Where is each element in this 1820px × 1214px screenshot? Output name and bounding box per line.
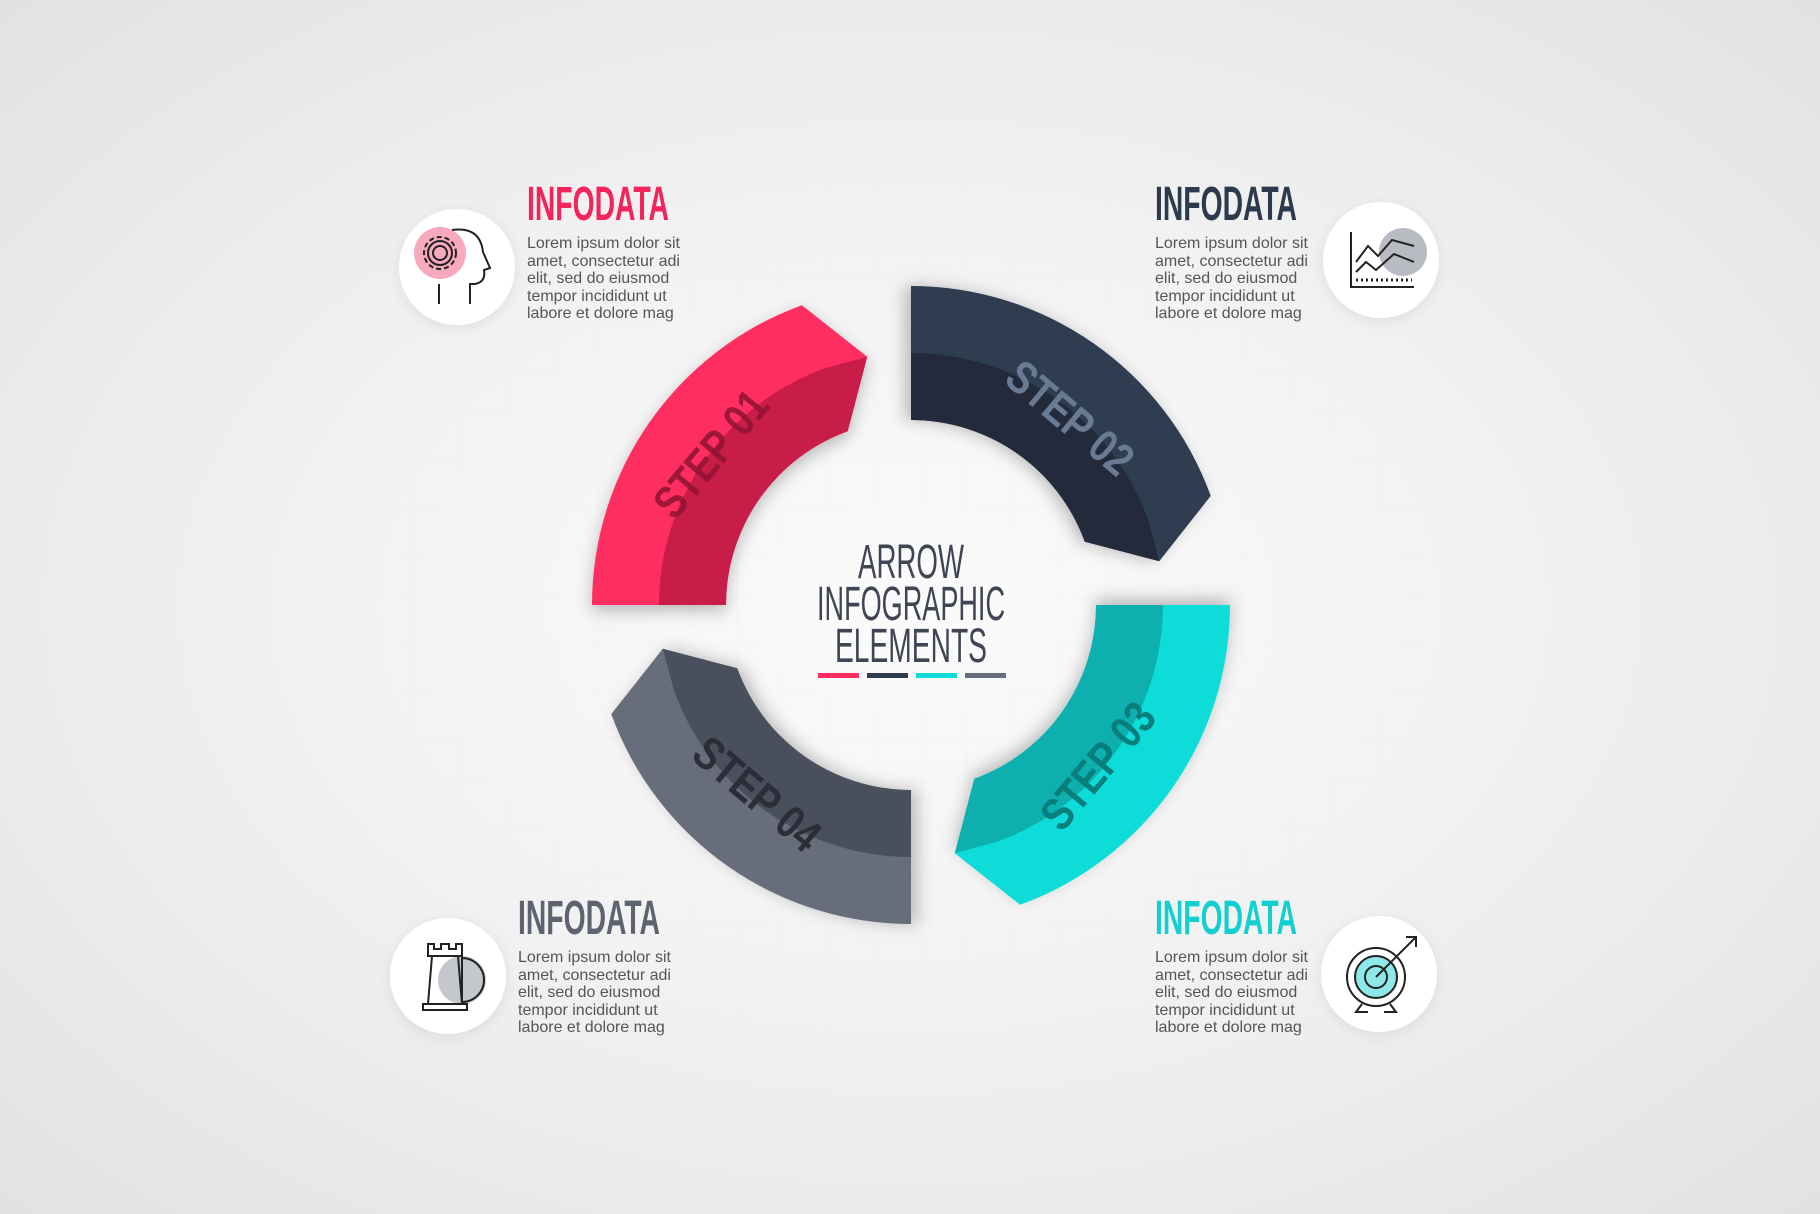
arrow segment: step 03 [955, 605, 1230, 905]
text block: infodata 2 [1155, 178, 1308, 322]
label: step 04: STEP 04 [683, 726, 832, 862]
text block: infodata 2: Lorem ipsum dolor sit [1155, 235, 1308, 252]
text block: infodata 1: elit, sed do eiusmod [527, 270, 669, 287]
text block: infodata 4: tempor incididunt ut [518, 1002, 658, 1019]
text block: infodata 3: elit, sed do eiusmod [1155, 984, 1297, 1001]
text block: infodata 3: Lorem ipsum dolor sit [1155, 949, 1308, 966]
label: step 03: STEP 03 [1030, 692, 1166, 840]
label: step 02: STEP 02 [996, 350, 1144, 486]
text block: infodata 1: amet, consectetur adi [527, 253, 680, 270]
text block: infodata 2: INFODATA [1155, 178, 1297, 231]
text block: infodata 1: labore et dolore mag [527, 305, 674, 322]
text block: infodata 1 [527, 178, 680, 322]
text block: infodata 3: amet, consectetur adi [1155, 967, 1308, 984]
icon: target [1321, 916, 1437, 1032]
text block: infodata 1: tempor incididunt ut [527, 288, 667, 305]
text block: infodata 2: elit, sed do eiusmod [1155, 270, 1297, 287]
text block: infodata 2: tempor incididunt ut [1155, 288, 1295, 305]
icon: chess rook with pie [390, 918, 506, 1034]
text block: infodata 1: INFODATA [527, 178, 669, 231]
arrow segment: step 04 [611, 649, 911, 924]
text block: infodata 3 [1155, 892, 1308, 1036]
text block: infodata 3: labore et dolore mag [1155, 1019, 1302, 1036]
arrow segment: step 01 [592, 305, 867, 605]
text block: infodata 3: INFODATA [1155, 892, 1297, 945]
text block: infodata 4 [518, 892, 672, 1036]
text block: infodata 3: tempor incididunt ut [1155, 1002, 1295, 1019]
text block: infodata 4: amet, consectetur adi [518, 967, 671, 984]
text block: infodata 4: elit, sed do eiusmod [518, 984, 660, 1001]
center title [817, 536, 1005, 673]
label: step 01: STEP 01 [643, 380, 779, 528]
center title: ELEMENTS [835, 620, 987, 673]
step labels [643, 350, 1166, 862]
icon: head with gear [399, 209, 515, 325]
text block: infodata 2: amet, consectetur adi [1155, 253, 1308, 270]
text block: infodata 4: INFODATA [518, 892, 660, 945]
center title: ARROW [858, 536, 964, 589]
icon: chart [1323, 202, 1439, 318]
text block: infodata 4: labore et dolore mag [518, 1019, 665, 1036]
text block: infodata 2: labore et dolore mag [1155, 305, 1302, 322]
center color bars [818, 673, 1006, 678]
text block: infodata 4: Lorem ipsum dolor sit [518, 949, 672, 966]
center title: INFOGRAPHIC [817, 578, 1005, 631]
text block: infodata 1: Lorem ipsum dolor sit [527, 235, 680, 252]
arrow segment: step 02 [911, 286, 1211, 561]
